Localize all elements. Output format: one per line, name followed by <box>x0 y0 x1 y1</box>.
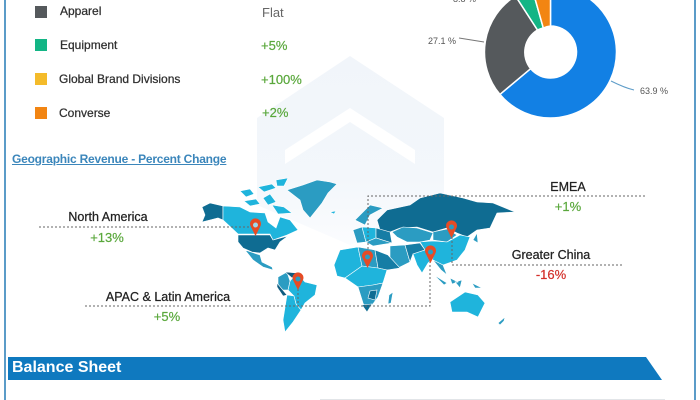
leader and label 27.1% <box>428 36 484 46</box>
Dark southern country <box>362 290 377 312</box>
line: Greater China <box>452 235 622 265</box>
right page border <box>694 0 696 400</box>
label: North America: +13% <box>90 230 124 245</box>
Sahel <box>358 247 378 268</box>
Southern Africa <box>358 283 383 312</box>
line: APAC and Latin America <box>85 260 430 306</box>
Arctic islands <box>240 178 336 214</box>
Central Asia <box>392 227 433 242</box>
label: Greater China <box>512 248 590 282</box>
Mongolia <box>433 229 457 242</box>
pin: North America <box>250 218 261 236</box>
donut chart <box>428 0 668 118</box>
pin: Latin America <box>292 272 304 290</box>
label: EMEA: +1% <box>555 199 581 214</box>
legend row: Equipment <box>35 38 288 53</box>
label: APAC and Latin America: APAC & Latin America <box>106 290 230 304</box>
label: North America <box>68 210 148 245</box>
legend: revenue segments <box>35 4 302 120</box>
Iran and Pakistan <box>405 243 425 262</box>
legend row: Apparel <box>35 4 284 20</box>
Northeast Africa <box>375 250 400 270</box>
Canada <box>223 206 298 240</box>
South America: Brazil <box>288 273 317 310</box>
pin: APAC <box>425 245 436 263</box>
legend row: Global Brand Divisions: Global Brand Divisions <box>59 72 180 86</box>
heading: geographic revenue: Geographic Revenue - Percent Change <box>12 152 226 166</box>
pin: EMEA <box>362 250 373 268</box>
slice: blue <box>500 0 616 118</box>
table top rule <box>320 399 665 400</box>
line: EMEA <box>368 196 645 258</box>
Central Europe <box>362 227 376 242</box>
South America: Colombia and Andes <box>278 272 290 290</box>
India <box>413 250 433 273</box>
label: APAC and Latin America <box>106 290 230 324</box>
Southeast Asia <box>433 260 482 288</box>
Southern Europe <box>366 238 392 246</box>
China <box>420 235 470 265</box>
legend row: Converse: +2% <box>262 105 288 120</box>
Russia <box>377 193 515 237</box>
legend row: Global Brand Divisions: +100% <box>261 72 302 87</box>
North Africa <box>334 247 362 278</box>
Scandinavia <box>355 205 383 225</box>
label: EMEA <box>550 180 586 214</box>
Venezuela and Peru <box>277 272 297 296</box>
label: EMEA: EMEA <box>550 180 586 194</box>
legend row: Apparel: Flat <box>262 5 284 20</box>
label: APAC and Latin America: +5% <box>154 309 180 324</box>
label: North America: North America <box>68 210 148 224</box>
line: North America <box>39 226 255 228</box>
slice: equipment <box>516 0 543 30</box>
section banner: Balance Sheet <box>8 357 662 380</box>
pin: China <box>446 220 457 238</box>
South America: Southern Cone <box>283 295 301 332</box>
Eastern Europe <box>376 228 392 243</box>
label: Greater China: Greater China <box>512 248 590 262</box>
Alaska <box>202 203 223 222</box>
Greenland <box>287 180 337 218</box>
section banner: Balance Sheet: Balance Sheet <box>12 359 121 376</box>
New Zealand <box>498 317 505 325</box>
USA <box>238 235 288 253</box>
leader and label 63.9% <box>611 81 668 96</box>
leader and label 63.9%: 63.9 % <box>640 86 668 96</box>
left page border <box>4 0 6 400</box>
leader and label 27.1%: 27.1 % <box>428 36 456 46</box>
Mexico and Central America <box>245 250 273 270</box>
legend row: Apparel: Apparel <box>60 4 101 18</box>
label: Greater China: -16% <box>536 267 566 282</box>
Central Africa <box>345 266 387 287</box>
Western Europe <box>353 227 366 243</box>
Australia <box>450 292 485 317</box>
slice: apparel <box>484 0 538 94</box>
slice: converse <box>532 0 550 28</box>
legend row: Global Brand Divisions <box>35 72 302 87</box>
legend row: Equipment: Equipment <box>60 38 117 52</box>
legend row: Converse <box>35 105 288 120</box>
legend row: Converse: Converse <box>59 106 110 120</box>
Madagascar and Japan <box>388 233 478 304</box>
Turkey and Arabia <box>390 245 410 268</box>
legend row: Equipment: +5% <box>261 38 287 53</box>
